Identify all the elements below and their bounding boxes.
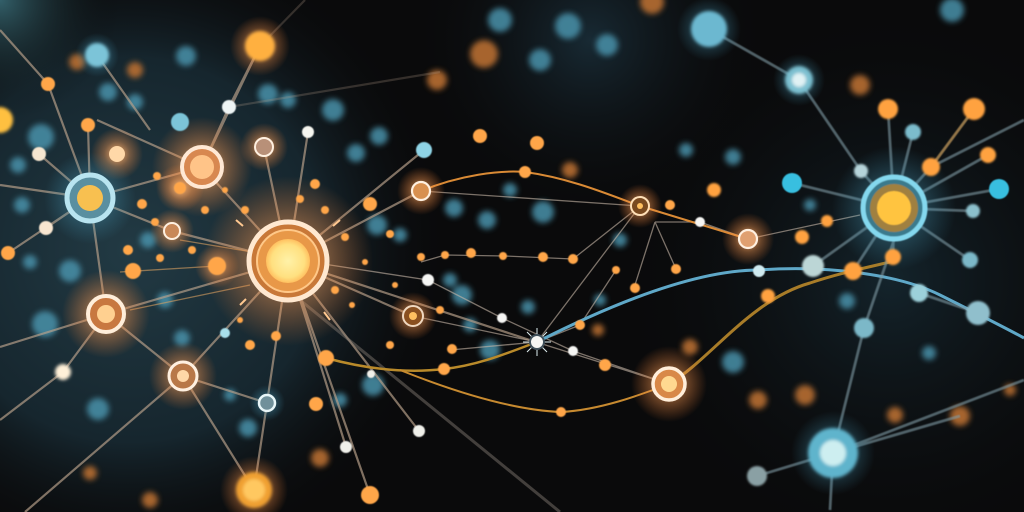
bottom ring node (169, 362, 197, 390)
star node (523, 328, 551, 356)
small ring nodes (109, 138, 757, 411)
small orange nodes around hub (1, 77, 681, 504)
connection lines: middle cluster (120, 191, 860, 384)
right cluster teal nodes (747, 124, 990, 486)
curve: gold (669, 262, 890, 384)
upper ring node (182, 147, 222, 187)
right teal hub node (863, 177, 925, 239)
lower-left ring node (88, 296, 124, 332)
small white and teal nodes (32, 100, 1009, 453)
connection lines: left cluster (0, 0, 560, 512)
lower-right ring node (653, 368, 685, 400)
left ring node (67, 175, 113, 221)
curve: yellow lower (326, 342, 537, 371)
blurred background teal dots (10, 0, 964, 437)
right cluster orange nodes (707, 98, 996, 303)
curve: orange upper (421, 172, 748, 239)
connection lines: right cluster (709, 29, 1024, 510)
central hub node (236, 220, 340, 320)
curve: orange bottom (400, 370, 669, 412)
curve: blue (537, 269, 1024, 342)
